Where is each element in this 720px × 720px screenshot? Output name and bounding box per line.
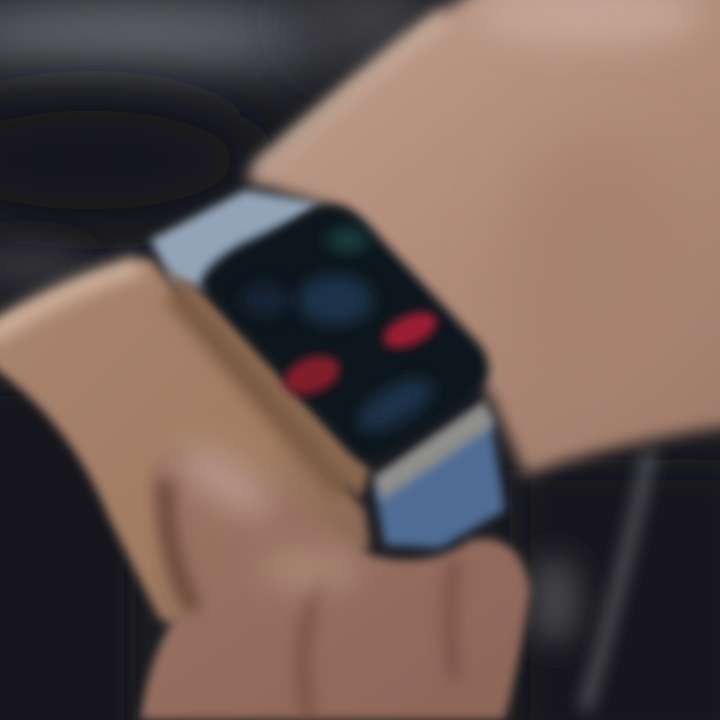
watch face — [200, 206, 489, 460]
watch face: teal glow — [328, 228, 368, 252]
watch band: lower blue — [372, 400, 505, 548]
watch face: lower red mark — [279, 348, 345, 402]
upper arm and wrist skin — [245, 0, 720, 475]
hand and fingers — [140, 432, 530, 720]
watch case edge — [158, 265, 370, 500]
watch face: blue data marks — [297, 275, 373, 325]
lower forearm skin — [0, 258, 370, 640]
watch face: upper red mark — [377, 304, 443, 356]
watch face: lower blue marks — [350, 368, 440, 442]
watch face: left blue marks — [240, 282, 290, 318]
watch band: upper light blue — [150, 190, 320, 290]
